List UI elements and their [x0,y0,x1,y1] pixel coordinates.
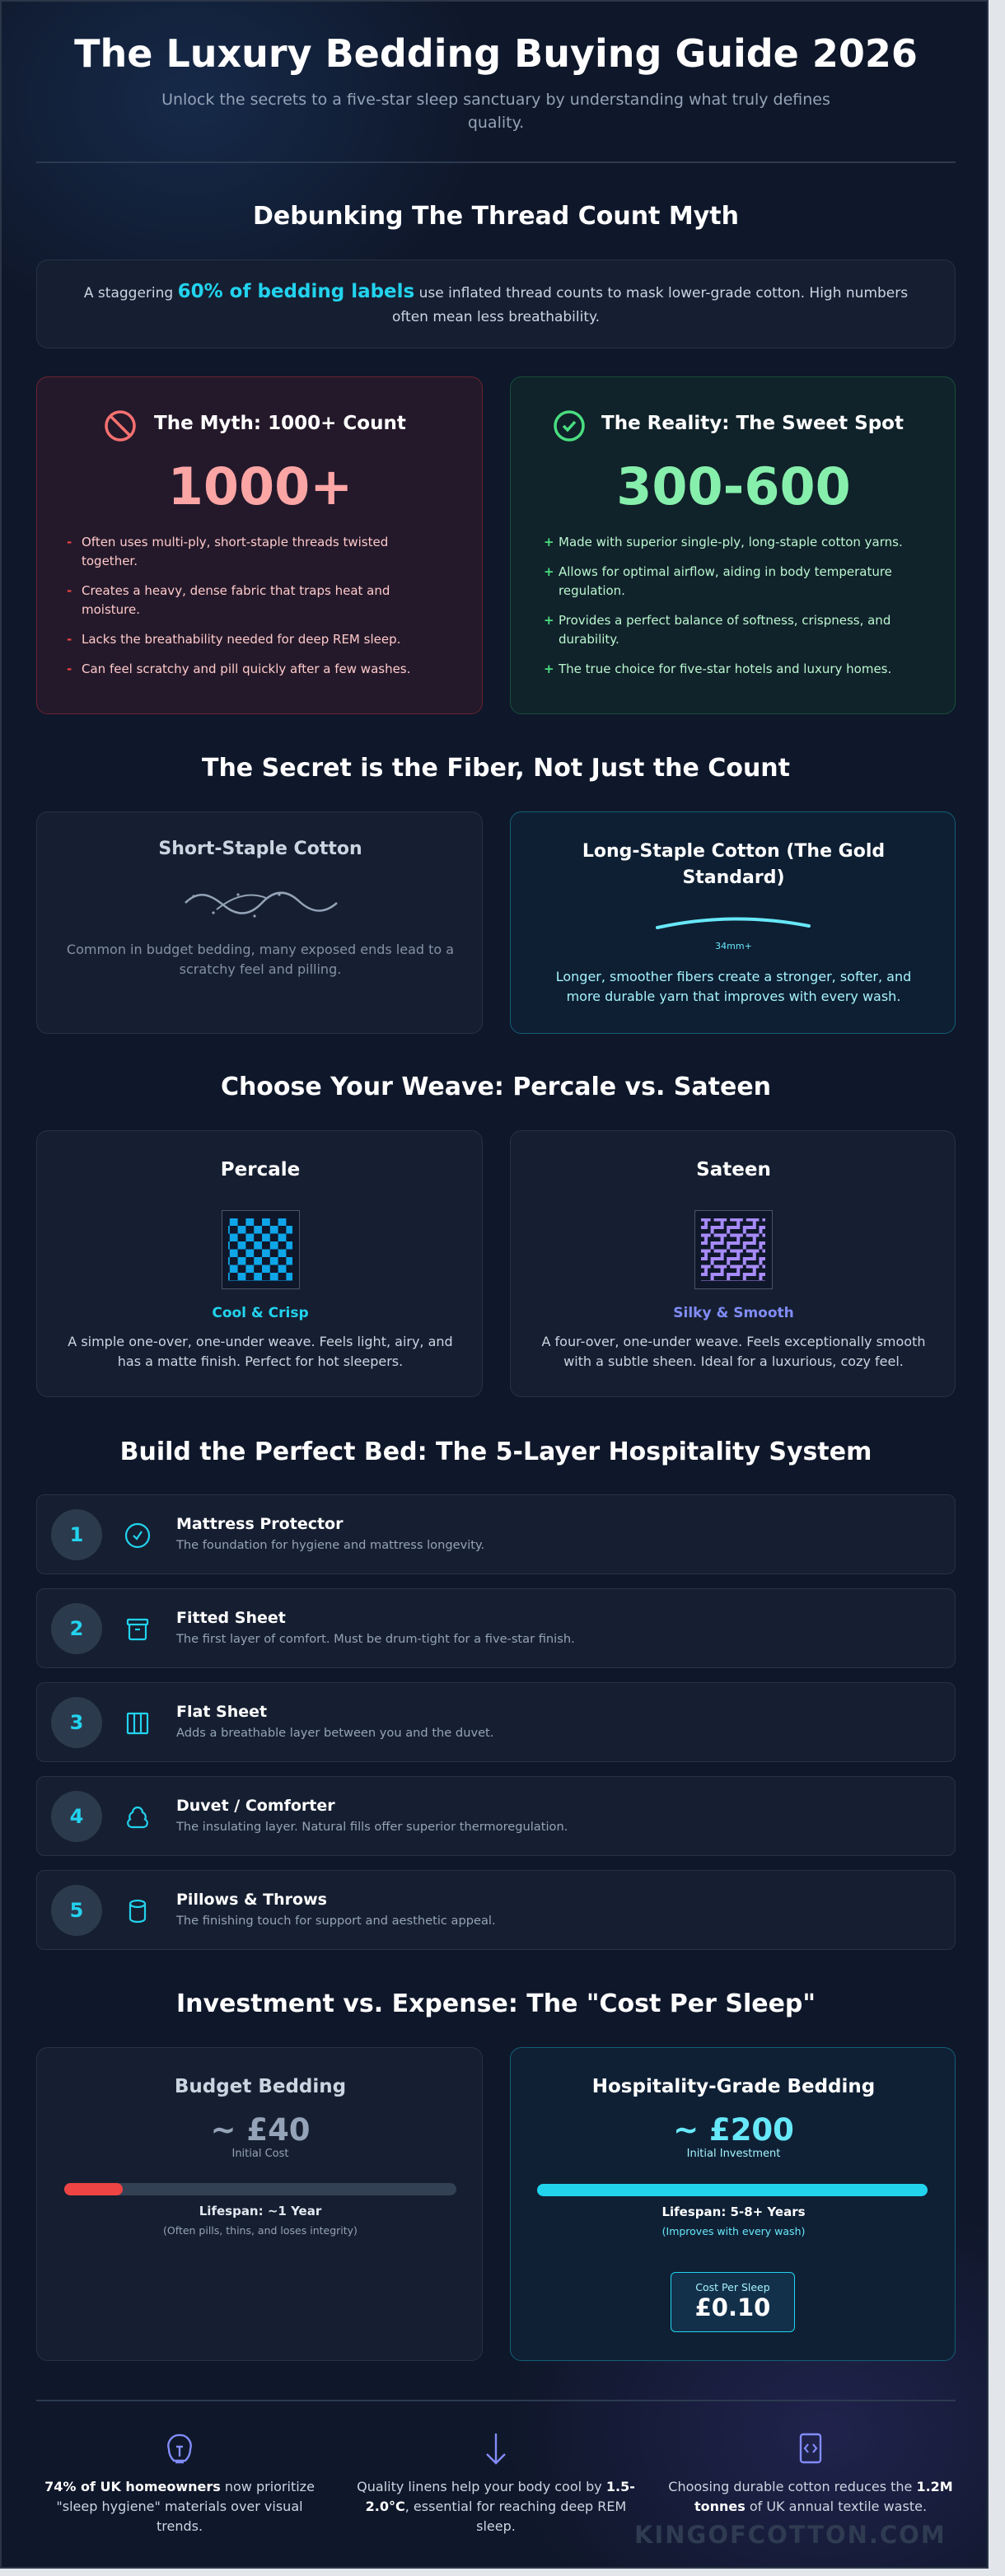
layer 1: The foundation for hygiene and mattress longevity. [176,1538,484,1552]
panel: budget bedding: Initial Cost [231,2148,288,2160]
panel: budget bedding: (Often pills, thins, and loses integrity) [163,2224,358,2237]
panel: long-staple: Longer, smoother fibers create a stronger, softer, and more durable yarn that improves with every wash. [556,969,911,1004]
layer 2: 2 [70,1617,83,1640]
layer 4: The insulating layer. Natural fills offer superior thermoregulation. [176,1820,568,1834]
myth header: The Myth: 1000+ Count [154,413,406,434]
panel: hospitality bedding [510,2047,956,2361]
panel: short-staple: Common in budget bedding, many exposed ends lead to a scratchy feel and pilling. [67,942,454,977]
callout: cost per sleep [671,2272,795,2332]
icon: columns [127,1712,148,1735]
panel: sateen: Sateen [696,1159,771,1180]
panel: sateen [510,1130,956,1397]
panel: percale: A simple one-over, one-under weave. Feels light, airy, and has a matte finish. Perfect for hot sleepers. [68,1334,453,1369]
title: The Luxury Bedding Buying Guide 2026 [74,31,918,76]
myth list: Can feel scratchy and pill quickly after a few washes. [82,662,410,676]
layer 1: Mattress Protector [176,1515,343,1533]
footer stat 1 [44,2433,315,2534]
reality list: + [544,613,554,628]
panel: hospitality bedding: ~ £200 [673,2112,794,2148]
reality list: + [544,662,554,676]
layer 2: The first layer of comfort. Must be drum-tight for a five-star finish. [176,1632,575,1646]
icon: arrow down [486,2433,506,2465]
panel: hospitality bedding: Hospitality-Grade Bedding [592,2076,875,2097]
heading: 5-layer system: Build the Perfect Bed: The 5-Layer Hospitality System [120,1438,872,1466]
layer 3: 3 [70,1711,83,1734]
layer 5: Pillows & Throws [176,1891,327,1909]
layer 3: Flat Sheet [176,1703,267,1721]
panel: budget bedding: Lifespan: ~1 Year [199,2204,321,2218]
myth list: - [67,583,72,598]
icon: cloud [127,1806,148,1829]
reality list: + [544,564,554,579]
footer stat 2 [357,2433,635,2534]
panel: budget bedding: ~ £40 [210,2112,311,2148]
icon: check [554,410,585,442]
reality list: Allows for optimal airflow, aiding in body temperature regulation. [559,564,892,598]
layer 3 [36,1682,956,1762]
footer stat 3: Choosing durable cotton reduces the 1.2M tonnes of UK annual textile waste. [668,2479,953,2514]
layer 2: Fitted Sheet [176,1609,286,1627]
layer 5: 5 [70,1899,83,1922]
icon: prohibited [105,410,136,442]
icon: shield check [125,1522,150,1549]
icon: sateen weave [694,1210,773,1289]
layer 4: 4 [70,1805,83,1828]
myth list: - [67,662,72,676]
big number 300-600: 300-600 [616,456,851,517]
panel: myth [36,376,483,714]
myth list: Lacks the breathability needed for deep REM sleep. [82,632,400,647]
subtitle: Unlock the secrets to a five-star sleep sanctuary by understanding what truly defines quality. [161,91,830,132]
panel: hospitality bedding: Lifespan: 5-8+ Years [661,2204,806,2219]
heading: fiber: The Secret is the Fiber, Not Just the Count [202,754,790,783]
icon: percale weave [222,1210,300,1289]
footer stat 2: Quality linens help your body cool by 1.5-2.0°C, essential for reaching deep REM sleep. [357,2479,635,2534]
stat callout: A staggering 60% of bedding labels use inflated thread counts to mask lower-grade cotton. High numbers [84,281,908,302]
myth list: Often uses multi-ply, short-staple threads twisted together. [82,535,388,568]
myth list: - [67,535,72,549]
watermark: KINGOFCOTTON.COM [634,2521,947,2549]
panel: long-staple: 34mm+ [715,941,752,951]
reality list: The true choice for five-star hotels and luxury homes. [559,662,891,676]
layer 2 [36,1588,956,1668]
footer stat 1: 74% of UK homeowners now prioritize "sleep hygiene" materials over visual trends. [44,2479,315,2534]
panel: hospitality bedding: (Improves with every wash) [662,2225,805,2237]
stat callout [36,259,956,348]
panel: budget bedding [36,2047,483,2361]
icon: long fiber [656,918,811,929]
myth list: - [67,632,72,647]
heading: thread count myth: Debunking The Thread Count Myth [253,202,739,231]
heading: cost per sleep: Investment vs. Expense: The "Cost Per Sleep" [176,1989,816,2018]
footer stat 3 [668,2433,953,2514]
icon: code box [799,2433,822,2463]
layer 4: Duvet / Comforter [176,1797,335,1815]
layer 1 [36,1494,956,1574]
panel: percale [36,1130,483,1397]
panel: short-staple [36,811,483,1034]
panel: percale: Percale [221,1159,300,1180]
stat callout: often mean less breathability. [392,309,600,325]
panel: budget bedding: Budget Bedding [175,2076,346,2097]
heading: weave: Choose Your Weave: Percale vs. Sateen [221,1073,771,1101]
panel: sateen: Silky & Smooth [673,1305,794,1321]
layer 1: 1 [70,1523,83,1546]
panel: hospitality bedding: Initial Investment [687,2148,780,2160]
panel: sateen: A four-over, one-under weave. Feels exceptionally smooth with a subtle sheen. Ideal for a luxurious, cozy feel. [541,1334,926,1369]
panel: long-staple: Long-Staple Cotton (The Gold Standard) [582,841,885,888]
panel: reality [510,376,956,714]
lifespan bar: 5-8 years [537,2184,928,2196]
layer 4 [36,1776,956,1856]
myth list: Creates a heavy, dense fabric that traps heat and moisture. [82,583,390,617]
big number 1000+: 1000+ [168,456,353,517]
callout: cost per sleep: Cost Per Sleep [695,2281,770,2293]
panel: short-staple: Short-Staple Cotton [158,839,362,859]
reality list: + [544,535,554,549]
layer 5: The finishing touch for support and aesthetic appeal. [176,1914,496,1928]
panel: long-staple [510,811,956,1034]
reality list: Made with superior single-ply, long-staple cotton yarns. [559,535,903,549]
lifespan bar: 1 year [64,2183,456,2195]
reality list: Provides a perfect balance of softness, crispness, and durability. [559,613,890,647]
layer 3: Adds a breathable layer between you and the duvet. [176,1726,493,1740]
icon: short fibers [185,891,338,918]
reality header: The Reality: The Sweet Spot [601,413,904,434]
panel: percale: Cool & Crisp [212,1305,309,1321]
icon: cylinder [129,1900,147,1923]
layer 5 [36,1870,956,1950]
icon: box [127,1618,148,1641]
myth list [67,535,410,676]
callout: cost per sleep: £0.10 [695,2293,770,2321]
reality list [544,535,903,676]
icon: lightbulb [167,2433,192,2463]
